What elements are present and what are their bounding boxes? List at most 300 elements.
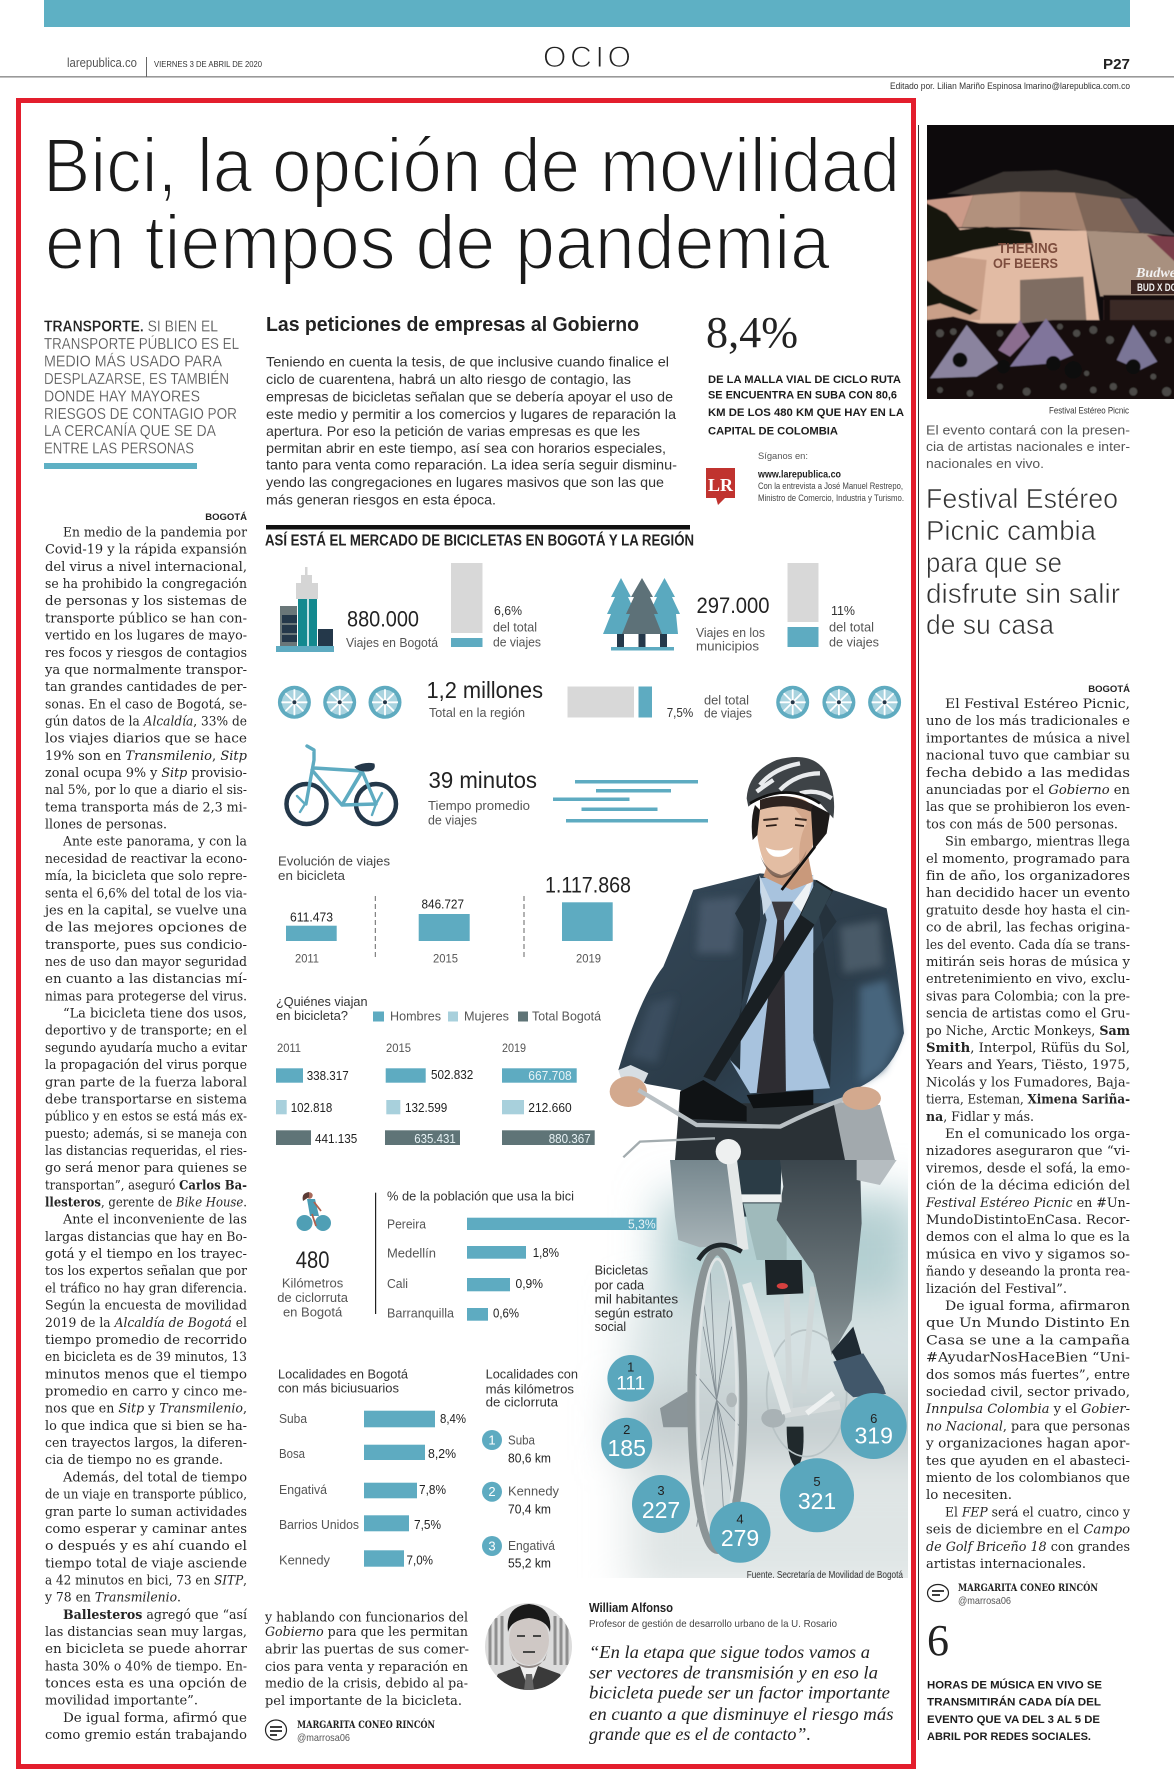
byline: right column bbox=[928, 1582, 1098, 1607]
bubbles: bicicletas por estrato: 227 bbox=[642, 1497, 680, 1523]
stat: 39 minutos: Tiempo promedio bbox=[428, 798, 530, 813]
stat: 480 kilómetros de ciclorruta: de ciclorruta bbox=[277, 1290, 349, 1305]
list: localidades con más kilómetros de ciclorruta: 2 bbox=[488, 1484, 496, 1499]
headline: Festival Estéreo Picnic: Festival Estéreo bbox=[926, 483, 1118, 514]
quote: William Alfonso: William Alfonso bbox=[589, 1601, 673, 1615]
body text: right column: ñando y deseando la pronta rea- bbox=[926, 1265, 1130, 1280]
body text: left column: nal 5%, por lo que a diario el sis- bbox=[45, 783, 247, 798]
body text: right column bbox=[925, 684, 1130, 1572]
chart: Evolución de viajes en bicicleta: 611.473 bbox=[290, 910, 333, 925]
body text: right column: mitirán seis horas de música y bbox=[926, 955, 1130, 970]
body text: left column: en cuanto a las distancias mí- bbox=[45, 972, 247, 987]
photo: Festival Estéreo Picnic dome bbox=[927, 125, 1174, 399]
body text: left column: hasta 30% o 40% de tiempo. En- bbox=[45, 1659, 247, 1674]
body text: right column: #AyudarNosHaceBien “Uni- bbox=[926, 1351, 1130, 1366]
chart: Evolución de viajes en bicicleta: 2015 bbox=[433, 952, 458, 966]
body text: left column: ya que normalmente transpor- bbox=[44, 663, 247, 678]
body text: right column: nacional tuvo que cambiar su bbox=[926, 749, 1130, 764]
body text: right column: no Nacional, para que personas bbox=[926, 1419, 1130, 1434]
body text: left column: transportan”, aseguró Carlos Ba- bbox=[45, 1178, 247, 1193]
article: Las peticiones de empresas al Gobierno: empresas de bicicletas señalan que se debería apoyar el uso de bbox=[266, 388, 673, 404]
article: Las peticiones de empresas al Gobierno: más generan riesgos en esta época. bbox=[266, 491, 496, 507]
body text: left column: movilidad importante”. bbox=[45, 1694, 198, 1709]
stat: 480 kilómetros de ciclorruta: en Bogotá bbox=[283, 1304, 343, 1320]
deck paragraph: TRANSPORTE. SI BIEN EL bbox=[44, 318, 218, 336]
title: en tiempos de pandemia bbox=[45, 200, 830, 286]
body text: left column: nes de uso dan mayor seguridad bbox=[45, 955, 247, 970]
stat: 8,4% bbox=[706, 308, 904, 438]
headline: Festival Estéreo Picnic bbox=[926, 483, 1120, 640]
quote: William Alfonso: grande que es el de contacto”. bbox=[589, 1724, 811, 1744]
body text: left column: público y en estos se está más ex- bbox=[45, 1110, 247, 1125]
body text: right column: anunciadas por el Gobierno en bbox=[926, 783, 1130, 798]
body text: left column: se ha prohibido la congregación bbox=[45, 577, 247, 592]
body text: left column: la propagación del virus porque bbox=[45, 1058, 247, 1073]
body text: right column: tes que ayuden en el abasteci- bbox=[926, 1454, 1130, 1469]
body text: right column: las que se prohibieron los even- bbox=[926, 800, 1130, 815]
chart: Quiénes viajan en bicicleta: 502.832 bbox=[431, 1067, 473, 1082]
deck paragraph: ENTRE LAS PERSONAS bbox=[44, 440, 194, 458]
body text: right column: ción de la décima edición del bbox=[926, 1179, 1130, 1194]
chart: Quiénes viajan en bicicleta: 667.708 bbox=[528, 1068, 572, 1083]
chart: % de la población que usa la bici: % de la población que usa la bici bbox=[387, 1188, 574, 1204]
stat: Viajes en los municipios: 297.000 bbox=[696, 593, 770, 618]
body text: right column: miento de los colombianos que bbox=[926, 1471, 1130, 1486]
chart: Evolución de viajes en bicicleta: en bicicleta bbox=[278, 868, 346, 883]
body text: left column: segundo ayudaría mucho a evitar bbox=[45, 1041, 248, 1056]
body text: right column: fin de año, los organizadores bbox=[926, 869, 1130, 884]
chart: Quiénes viajan en bicicleta: 441.135 bbox=[315, 1131, 357, 1146]
stat: 8,4%: DE LA MALLA VIAL DE CICLO RUTA bbox=[708, 374, 901, 386]
article: Las peticiones de empresas al Gobierno: apertura. Por eso la petición de varias empresas es que les bbox=[266, 423, 640, 439]
body text: continuation: abrir las puertas de sus comer- bbox=[265, 1642, 469, 1658]
body text: left column: de personas y los sistemas de bbox=[45, 594, 247, 609]
body text: right column: El FEP será el cuatro, cinco y bbox=[945, 1505, 1130, 1520]
byline: Margarita Coneo Rincón bbox=[266, 1719, 435, 1744]
body text: left column: el tráfico no hay gran diferencia. bbox=[45, 1281, 247, 1296]
body text: left column: promedio en carro y cinco me- bbox=[45, 1384, 247, 1400]
stat: Viajes en Bogotá bbox=[346, 563, 541, 650]
body text: right column: demos con el alma lo que es la bbox=[926, 1230, 1130, 1245]
body text: left column: lo que indica que si bien se ha- bbox=[45, 1419, 247, 1434]
body text: right column: tos con más de 500 personas. bbox=[926, 817, 1118, 832]
stat: 6 horas de música: HORAS DE MÚSICA EN VIVO SE bbox=[927, 1678, 1102, 1692]
stat: 6 horas de música bbox=[927, 1616, 1102, 1743]
body text: left column: mía, la bicicleta que solo repre- bbox=[45, 869, 247, 884]
stat: 1,2 millones: Total en la región bbox=[429, 705, 525, 720]
chart: localidades con más biciusuarios: 7,8% bbox=[419, 1482, 446, 1497]
chart: % de la población que usa la bici: 1,8% bbox=[533, 1245, 559, 1260]
chart: Evolución de viajes en bicicleta: 846.727 bbox=[422, 896, 464, 911]
page header bbox=[0, 41, 1174, 92]
chart: Quiénes viajan en bicicleta: 132.599 bbox=[405, 1100, 447, 1115]
list: localidades con más kilómetros de ciclorruta: 3 bbox=[488, 1538, 496, 1554]
article: Las peticiones de empresas al Gobierno: este medio y permitir a los comercios y lugares de reparación la bbox=[266, 406, 676, 422]
body text: left column: del virus a nivel internacional, bbox=[45, 560, 247, 575]
stat: 6 horas de música: 6 bbox=[927, 1616, 949, 1665]
chart: Quiénes viajan en bicicleta bbox=[276, 994, 602, 1146]
list: localidades con más kilómetros de ciclorruta: Suba bbox=[508, 1432, 536, 1448]
upper body bbox=[610, 757, 904, 1164]
photo: Festival Estéreo Picnic dome: THERING bbox=[998, 240, 1058, 257]
headline: Festival Estéreo Picnic: para que se bbox=[926, 547, 1062, 578]
photo caption: Festival Estéreo Picnic bbox=[1049, 406, 1129, 416]
body text: left column: vertido en los lugares de mayo- bbox=[44, 629, 247, 644]
body text: left column: jes en la capital, se vuelve una bbox=[43, 904, 247, 918]
body text: left column: gran parte de la fuerza laboral bbox=[45, 1075, 247, 1090]
body text: left column: como gremio están trabajando bbox=[45, 1728, 247, 1743]
body text: right column: de Golf Briceño 18 con grandes bbox=[926, 1540, 1130, 1555]
top teal band bbox=[44, 0, 1130, 27]
body text: right column: po Niche, Arctic Monkeys, Sam bbox=[926, 1024, 1130, 1039]
icon: LR logo bbox=[706, 468, 735, 505]
body text: right column: tierra, Esteman, Ximena Sariña- bbox=[926, 1093, 1130, 1108]
body text: left column: necesidad de reactivar la econo- bbox=[45, 852, 247, 867]
bubbles: bicicletas por estrato: 1 bbox=[627, 1360, 634, 1374]
stat: 1,2 millones: 7,5% bbox=[667, 706, 693, 720]
icon: woman cyclist bbox=[296, 1192, 331, 1231]
chart: Quiénes viajan en bicicleta: 2011 bbox=[277, 1041, 301, 1055]
text: bicicletas por cada mil habitantes: por cada bbox=[595, 1278, 645, 1292]
chart: % de la población que usa la bici: 0,9% bbox=[516, 1276, 543, 1291]
legend: Mujeres bbox=[464, 1008, 509, 1024]
page header: P27 bbox=[1103, 56, 1130, 73]
icon: city building bbox=[276, 567, 334, 652]
body text: left column: largas distancias que hay en Bo- bbox=[45, 1230, 247, 1245]
list: localidades con más kilómetros de ciclorruta: 55,2 km bbox=[508, 1556, 551, 1570]
page header: Editado por. Lilian Mariño Espinosa lmarino@larepublica.com.co bbox=[890, 81, 1130, 92]
list: localidades con más kilómetros de ciclorruta: 80,6 km bbox=[508, 1450, 551, 1466]
stat: 6 horas de música: ABRIL POR REDES SOCIALES. bbox=[927, 1731, 1091, 1743]
article: Las peticiones de empresas al Gobierno bbox=[266, 314, 677, 507]
text: bicicletas por cada mil habitantes: según estrato bbox=[595, 1306, 673, 1320]
stat: 8,4%: SE ENCUENTRA EN SUBA CON 80,6 bbox=[708, 390, 897, 402]
stat: Viajes en Bogotá: 880.000 bbox=[347, 606, 419, 632]
body text: left column: Ballesteros agregó que “así bbox=[63, 1608, 248, 1623]
deck paragraph: TRANSPORTE PÚBLICO ES EL bbox=[44, 336, 239, 353]
body text: left column: deportivo y de transporte; en el bbox=[45, 1024, 247, 1039]
body text: left column: minutos menos que el tiempo bbox=[45, 1367, 247, 1382]
bubbles: bicicletas por estrato: 185 bbox=[608, 1435, 646, 1461]
chart: localidades con más biciusuarios: Suba bbox=[279, 1411, 308, 1426]
body text: right column: na, Fidlar y más. bbox=[926, 1110, 1034, 1125]
stat: 8,4%: 8,4% bbox=[706, 308, 798, 357]
body text: left column: los viajes diarios que se hace bbox=[45, 732, 247, 747]
chart: % de la población que usa la bici: 5,3% bbox=[628, 1216, 656, 1232]
chart: % de la población que usa la bici: Pereira bbox=[387, 1216, 427, 1232]
body text: left column: De igual forma, afirmó que bbox=[63, 1711, 247, 1726]
body text: right column: les del evento. Cada día se trans- bbox=[926, 938, 1130, 953]
promo: siganos en larepublica.co bbox=[706, 451, 904, 505]
stat: Viajes en los municipios: municipios bbox=[696, 638, 760, 654]
body text: continuation: y hablando con funcionarios del bbox=[264, 1610, 468, 1626]
body text: right column: co de abril, las fechas origina- bbox=[926, 921, 1130, 936]
bubbles: bicicletas por estrato: 279 bbox=[721, 1525, 759, 1551]
body text: right column: uno de los más tradicionales e bbox=[926, 714, 1130, 729]
legend: Hombres bbox=[390, 1008, 441, 1024]
quote: William Alfonso: “En la etapa que sigue todos vamos a bbox=[589, 1642, 870, 1662]
body text: left column bbox=[43, 512, 248, 1743]
article: Las peticiones de empresas al Gobierno: Las peticiones de empresas al Gobierno bbox=[266, 314, 639, 336]
icon: LR logo: LR bbox=[708, 475, 734, 495]
body text: right column: que Un Mundo Distinto En bbox=[926, 1316, 1130, 1331]
body text: left column: cen trayectos largos, la diferen- bbox=[45, 1436, 247, 1451]
body text: right column: BOGOTÁ bbox=[1088, 684, 1130, 695]
body text: continuation: Gobierno para que les permitan bbox=[265, 1625, 468, 1640]
bubbles: bicicletas por estrato: 2 bbox=[623, 1422, 630, 1437]
chart: % de la población que usa la bici: Cali bbox=[387, 1276, 408, 1291]
page header: larepublica.co bbox=[67, 56, 137, 70]
headline: Festival Estéreo Picnic: de su casa bbox=[926, 609, 1054, 640]
body text: left column: las distancias sean muy largas, bbox=[45, 1625, 247, 1640]
article: Las peticiones de empresas al Gobierno: ciclo de cuarentena, habrá un alto riesgo de contagio, las bbox=[266, 371, 631, 387]
quote: William Alfonso: ser vectores de transmisión y en eso la bbox=[589, 1662, 878, 1682]
stat: Viajes en los municipios: de viajes bbox=[829, 634, 879, 650]
bubbles: bicicletas por estrato: 5 bbox=[813, 1474, 821, 1489]
bubbles: bicicletas por estrato: 321 bbox=[798, 1488, 836, 1514]
body text: right column: entretenimiento en vivo, exclu- bbox=[926, 972, 1130, 987]
bubbles: bicicletas por estrato: 111 bbox=[616, 1374, 645, 1394]
right column intro: nacionales en vivo. bbox=[926, 456, 1044, 471]
body text: right column: fecha debido a las medidas bbox=[926, 766, 1130, 781]
body text: left column: go será menor para quienes se bbox=[45, 1161, 247, 1176]
bubbles: bicicletas por estrato: 4 bbox=[736, 1512, 744, 1526]
body text: right column: sivas para Colombia; con la pre- bbox=[926, 989, 1130, 1004]
stat: Viajes en Bogotá: del total bbox=[493, 620, 537, 634]
list: localidades con más kilómetros de ciclorruta: más kilómetros bbox=[486, 1382, 574, 1396]
portrait: William Alfonso bbox=[485, 1603, 572, 1690]
title bbox=[43, 123, 900, 286]
stat: 6 horas de música: EVENTO QUE VA DEL 3 AL 5 DE bbox=[927, 1714, 1100, 1726]
icon: comment bubble right bbox=[928, 1584, 948, 1602]
promo: siganos en larepublica.co: Síganos en: bbox=[758, 451, 808, 462]
body text: left column: Covid-19 y la rápida expansión bbox=[45, 543, 247, 558]
article: Las peticiones de empresas al Gobierno: Teniendo en cuenta la tesis, de que inclusive cuando finalice el bbox=[266, 354, 669, 370]
body text: right column: dos somos más fuertes”, entre bbox=[926, 1368, 1130, 1383]
page header: VIERNES 3 DE ABRIL DE 2020 bbox=[154, 59, 262, 69]
body text: left column: transporte público se han con- bbox=[45, 611, 247, 626]
chart: Evolución de viajes en bicicleta: 2019 bbox=[576, 952, 601, 966]
body text: right column: nizadores aseguraron que “vi- bbox=[926, 1144, 1130, 1159]
body text: right column: artistas internacionales. bbox=[926, 1557, 1086, 1572]
stat: Viajes en los municipios: del total bbox=[829, 620, 874, 634]
body text: right column: El Festival Estéreo Picnic, bbox=[945, 697, 1130, 712]
body text: continuation: pel importante de la bicicleta. bbox=[265, 1694, 462, 1709]
photo: cyclist in a suit bbox=[610, 757, 904, 1550]
text: bicicletas por cada mil habitantes: mil habitantes bbox=[595, 1292, 679, 1306]
bubbles: bicicletas por estrato: 6 bbox=[870, 1411, 877, 1426]
chart: Evolución de viajes en bicicleta: 2011 bbox=[295, 952, 319, 966]
right column intro bbox=[926, 422, 1130, 471]
body text: continuation: cios para venta y reparación en bbox=[265, 1660, 468, 1675]
icon: comment bubble bbox=[266, 1720, 286, 1740]
list: localidades con más kilómetros de ciclorruta: 1 bbox=[488, 1432, 496, 1448]
chart: localidades con más biciusuarios: 8,4% bbox=[440, 1411, 466, 1426]
body text: left column: nos que en Sitp y Transmilenio, bbox=[45, 1402, 247, 1417]
stat: 480 kilómetros de ciclorruta: Kilómetros bbox=[282, 1276, 344, 1290]
body text: left column: transporte, pues sus condicio- bbox=[45, 938, 247, 953]
infographic heading bbox=[265, 525, 694, 550]
bubbles: bicicletas por estrato bbox=[601, 1355, 907, 1563]
body text: right column: importantes de música a nivel bbox=[926, 731, 1130, 746]
body text: right column: MundoDistintoEnCasa. Recor- bbox=[926, 1213, 1130, 1228]
body text: left column: tan grandes cantidades de per- bbox=[45, 680, 247, 695]
chart: Quiénes viajan en bicicleta: 338.317 bbox=[307, 1068, 349, 1083]
body text: left column: sonas. En el caso de Bogotá, se- bbox=[45, 697, 247, 712]
body text: continuation bbox=[264, 1610, 469, 1709]
infographic heading: ASÍ ESTÁ EL MERCADO DE BICICLETAS EN BOGOTÁ Y LA REGIÓN bbox=[265, 532, 694, 550]
body text: right column: Years and Years, Tiësto, 1975, bbox=[925, 1058, 1130, 1073]
stat: 1,2 millones: 1,2 millones bbox=[426, 677, 543, 703]
body text: left column: tos los expertos señalan que por bbox=[45, 1264, 248, 1279]
body text: left column: nimas para protegerse del virus. bbox=[45, 989, 247, 1004]
chart: Quiénes viajan en bicicleta: 212.660 bbox=[528, 1100, 572, 1115]
body text: left column: en bicicleta se puede ahorrar bbox=[45, 1642, 248, 1657]
chart: localidades con más biciusuarios: Localidades en Bogotá bbox=[278, 1366, 409, 1382]
body text: right column: Festival Estéreo Picnic en #Un- bbox=[925, 1196, 1130, 1211]
chart: localidades con más biciusuarios: 8,2% bbox=[428, 1446, 456, 1461]
list: localidades con más kilómetros de ciclorruta: de ciclorruta bbox=[486, 1394, 559, 1410]
chart: % de la población que usa la bici: Medellín bbox=[387, 1246, 436, 1260]
quote: William Alfonso bbox=[589, 1601, 894, 1744]
body text: left column: 2019 de la Alcaldía de Bogotá el bbox=[45, 1316, 247, 1331]
promo: siganos en larepublica.co: Con la entrevista a José Manuel Restrepo, bbox=[758, 481, 903, 492]
legend: Total Bogotá bbox=[532, 1008, 602, 1024]
deck paragraph: DESPLAZARSE, ES TAMBIÉN bbox=[44, 371, 229, 388]
body text: left column: Ante este panorama, y con la bbox=[62, 835, 247, 850]
icon: wheels right bbox=[778, 688, 899, 717]
bike rear parts bbox=[761, 1287, 847, 1468]
list: localidades con más kilómetros de ciclorruta: Kennedy bbox=[508, 1484, 559, 1498]
body text: right column: sencia de artistas como el Gru- bbox=[926, 1007, 1130, 1022]
body text: left column: y 78 en Transmilenio. bbox=[44, 1591, 181, 1606]
article: Las peticiones de empresas al Gobierno: yendo las congregaciones en lugares masivos que son las que bbox=[266, 474, 664, 490]
chart: % de la población que usa la bici bbox=[375, 1188, 656, 1321]
body text: left column: puesto; además, si se maneja con bbox=[45, 1127, 247, 1142]
body text: right column: En el comunicado los orga- bbox=[945, 1127, 1130, 1142]
body text: left column: zonal ocupa 9% y Sitp provisio- bbox=[45, 766, 247, 781]
chart: Quiénes viajan en bicicleta: 102.818 bbox=[291, 1100, 332, 1115]
body text: right column: Casa se une a la campaña bbox=[926, 1333, 1130, 1348]
red article frame bbox=[18, 100, 914, 1766]
chart: Evolución de viajes en bicicleta: 1.117.868 bbox=[545, 873, 631, 898]
quote: William Alfonso: bicicleta puede ser un factor importante bbox=[589, 1682, 890, 1702]
byline: right column: @marrosa06 bbox=[958, 1595, 1011, 1607]
body text: right column: lización del Festival”. bbox=[926, 1282, 1067, 1297]
bubbles: bicicletas por estrato: 319 bbox=[855, 1422, 893, 1448]
page header: OCIO bbox=[543, 41, 631, 74]
chart: Quiénes viajan en bicicleta: 880.367 bbox=[549, 1131, 591, 1146]
body text: right column: seis de diciembre en el Campo bbox=[926, 1523, 1130, 1538]
stat: Viajes en Bogotá: Viajes en Bogotá bbox=[346, 635, 439, 650]
body text: left column: cia de tiempo no es grande. bbox=[45, 1453, 223, 1468]
body text: left column: gún datos de la Alcaldía, 33% de bbox=[45, 714, 247, 730]
stat: Viajes en los municipios: Viajes en los bbox=[696, 625, 765, 640]
stat: 1,2 millones bbox=[426, 677, 752, 720]
body text: right column: lo necesiten. bbox=[926, 1488, 1012, 1503]
chart: localidades con más biciusuarios: Kennedy bbox=[279, 1552, 330, 1568]
body text: right column: Innpulsa Colombia y el Gobier- bbox=[925, 1402, 1130, 1417]
stat: 39 minutos: 39 minutos bbox=[428, 767, 537, 793]
body text: left column: tonces esta es una opción de bbox=[45, 1677, 247, 1692]
lower body and bicycle bbox=[660, 1160, 897, 1550]
body text: left column: debe transportarse en sistema bbox=[45, 1092, 247, 1107]
deck paragraph bbox=[44, 318, 239, 469]
text: bicicletas por cada mil habitantes: social bbox=[595, 1319, 626, 1334]
stat: Viajes en los municipios bbox=[696, 563, 879, 654]
icon: trees bbox=[603, 578, 680, 650]
body text: left column: senta el 6,6% del total de los via- bbox=[45, 886, 247, 901]
body text: left column: Ante el inconveniente de las bbox=[62, 1213, 247, 1228]
bubbles: bicicletas por estrato: 3 bbox=[657, 1483, 665, 1498]
body text: continuation: medio de la crisis, debido al pa- bbox=[265, 1676, 468, 1692]
stat: 8,4%: KM DE LOS 480 KM QUE HAY EN LA bbox=[708, 407, 904, 419]
body text: left column: tiempo total de viaje asciende bbox=[45, 1556, 247, 1571]
body text: left column: tema transporta más de 2,3 mi- bbox=[45, 800, 247, 815]
chart: localidades con más biciusuarios: Bosa bbox=[279, 1446, 306, 1461]
chart: Quiénes viajan en bicicleta: en bicicleta? bbox=[276, 1008, 348, 1023]
photo: Festival Estéreo Picnic dome: OF BEERS bbox=[993, 255, 1058, 271]
stat: Viajes en Bogotá: 6,6% bbox=[494, 604, 522, 618]
body text: left column: 19% son en Transmilenio, Sitp bbox=[45, 749, 247, 764]
body text: right column: han decidido hacer un evento bbox=[926, 886, 1130, 901]
chart: Quiénes viajan en bicicleta: 2015 bbox=[386, 1041, 411, 1055]
text: bicicletas por cada mil habitantes bbox=[595, 1262, 679, 1334]
deck paragraph: LA CERCANÍA QUE SE DA bbox=[44, 423, 217, 440]
headline: Festival Estéreo Picnic: disfrute sin salir bbox=[926, 578, 1120, 609]
body text: right column: Smith, Interpol, Rüfüs du Sol, bbox=[926, 1041, 1130, 1056]
text: bicicletas por cada mil habitantes: Bicicletas bbox=[595, 1262, 649, 1278]
chart: localidades con más biciusuarios: Engativá bbox=[279, 1482, 328, 1497]
body text: right column: De igual forma, afirmaron bbox=[945, 1299, 1130, 1314]
stat: 480 kilómetros de ciclorruta: 480 bbox=[296, 1247, 329, 1274]
column divider bbox=[918, 125, 919, 1740]
chart: Evolución de viajes en bicicleta: Evolución de viajes bbox=[278, 854, 390, 868]
body text: left column: Además, del total de tiempo bbox=[62, 1470, 247, 1485]
chart: % de la población que usa la bici: Barranquilla bbox=[387, 1306, 455, 1320]
body text: left column: En medio de la pandemia por bbox=[63, 526, 248, 540]
stat: 1,2 millones: de viajes bbox=[704, 706, 752, 720]
icon: bicycle bbox=[286, 746, 396, 824]
headline: Festival Estéreo Picnic: Picnic cambia bbox=[926, 515, 1096, 546]
body text: right column: Sin embargo, mientras llega bbox=[945, 835, 1130, 850]
title: Bici, la opción de movilidad bbox=[43, 123, 900, 209]
promo: siganos en larepublica.co: Ministro de Comercio, Industria y Turismo. bbox=[758, 493, 904, 504]
article: Las peticiones de empresas al Gobierno: permitan abrir en este tiempo, así sea con horarios especiales, bbox=[266, 440, 666, 456]
stat: 8,4%: CAPITAL DE COLOMBIA bbox=[708, 426, 838, 438]
body text: right column: música en vivo y sigamos so- bbox=[926, 1247, 1130, 1262]
body text: left column: gran parte lo suman actividades bbox=[45, 1505, 247, 1520]
body text: left column: Según la encuesta de movilidad bbox=[45, 1299, 247, 1314]
right column intro: El evento contará con la presen- bbox=[926, 422, 1130, 438]
byline: Margarita Coneo Rincón: MARGARITA CONEO RINCÓN bbox=[297, 1719, 435, 1731]
body text: right column: Nicolás y los Fumadores, Baja- bbox=[926, 1075, 1130, 1090]
body text: left column: a 42 minutos en bici, 73 en SITP, bbox=[45, 1574, 247, 1588]
body text: right column: y organizaciones hagan apor- bbox=[925, 1437, 1130, 1452]
body text: left column: BOGOTÁ bbox=[205, 512, 247, 523]
stat: 1,2 millones: del total bbox=[704, 692, 749, 708]
body text: left column: tiempo promedio de recorrido bbox=[45, 1333, 247, 1348]
body text: left column: o después y es ahí cuando el bbox=[45, 1539, 247, 1554]
legend bbox=[373, 1008, 602, 1024]
byline: right column: MARGARITA CONEO RINCÓN bbox=[958, 1582, 1098, 1594]
stat: 6 horas de música: TRANSMITIRÁN CADA DÍA DEL bbox=[927, 1696, 1101, 1708]
stat: 480 kilómetros de ciclorruta bbox=[277, 1192, 349, 1320]
list: localidades con más kilómetros de ciclorruta: Localidades con bbox=[486, 1366, 578, 1382]
body text: right column: sociedad civil, sector privado, bbox=[926, 1385, 1130, 1400]
deck paragraph: RIESGOS DE CONTAGIO POR bbox=[44, 406, 237, 423]
promo: siganos en larepublica.co: www.larepublica.co bbox=[757, 470, 841, 480]
